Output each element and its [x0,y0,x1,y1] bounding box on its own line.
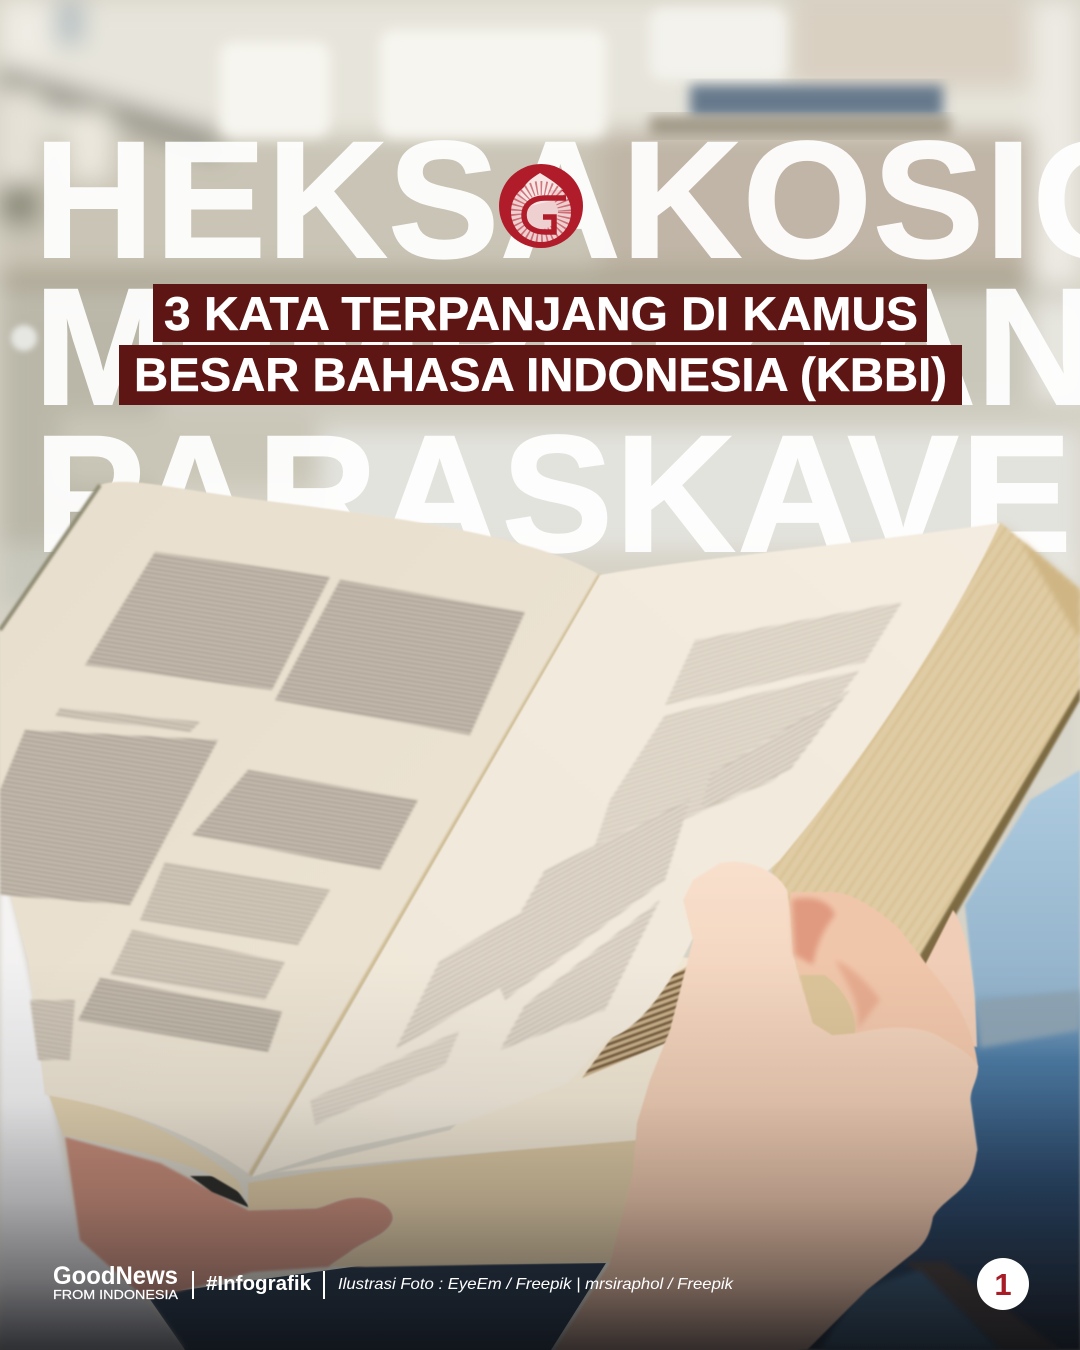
jeans on the right [800,770,1080,1350]
gap between thumb and finger [800,975,855,1035]
index finger [790,892,979,1068]
right hand turning the page [555,862,978,1350]
hand back and thumb [555,862,978,1350]
left page text columns [0,552,525,1060]
footer [54,1266,734,1300]
fore edge of the book [770,522,1080,1040]
title [119,284,962,405]
jeans at the bottom [147,1263,606,1350]
hashtag: #Infografik [206,1273,312,1295]
bottom dark gradient [0,1024,1080,1350]
exposed dark text under the curl [582,965,690,1078]
page number badge [977,1258,1029,1310]
left page [0,482,600,1175]
brand: GoodNews from Indonesia: GoodNews [53,1262,178,1290]
title line 1: 3 KATA TERPANJANG DI KAMUS [164,287,918,340]
page number badge: 1 [994,1267,1012,1302]
big background words [44,140,1080,554]
brand: GoodNews from Indonesia: FROM INDONESIA [53,1287,178,1302]
shirt sleeve on the left [0,860,185,1350]
ring finger behind [925,910,977,1047]
book [0,482,1080,1267]
left page underside [48,1092,244,1195]
finger shading [792,898,835,965]
gutter shadow [250,575,600,1175]
right page [252,523,1000,1177]
right page text columns [310,602,902,1125]
left hand holding the book [65,1137,393,1300]
logo: Garuda G emblem [499,164,583,248]
title line 2: BESAR BAHASA INDONESIA (KBBI) [134,348,947,401]
book bottom page block [248,1135,640,1267]
photo credit: Ilustrasi Foto : EyeEm / Freepik | mrsiraphol / Freepik [338,1276,734,1293]
jeans cuff [977,990,1080,1048]
strap detail at lower right [910,1262,1042,1344]
brand: GoodNews from Indonesia [54,1266,178,1300]
page block under the curled page [282,957,688,1172]
book spine shadow [190,1176,250,1208]
